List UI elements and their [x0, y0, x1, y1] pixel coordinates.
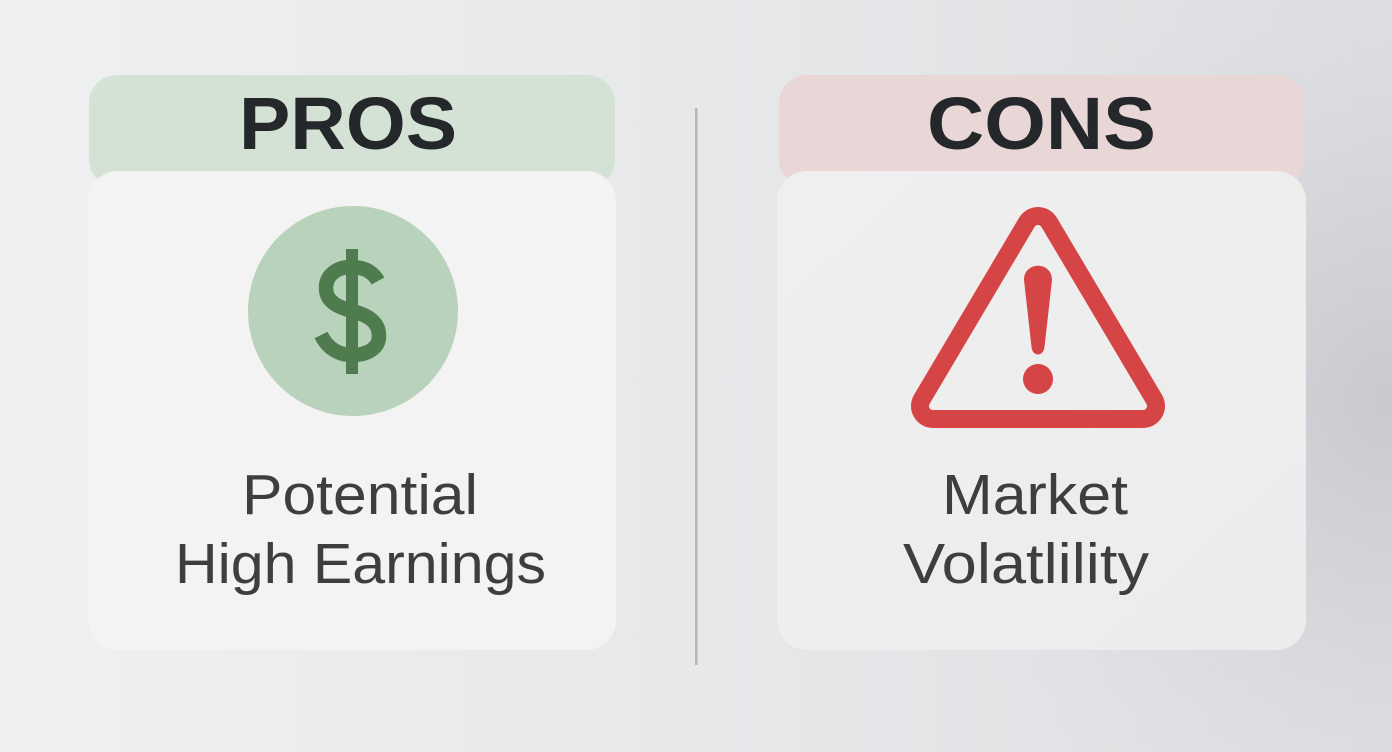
cons card: [777, 171, 1306, 650]
cons header band: [779, 75, 1305, 187]
text: Market Volatlility: Volatlility: [903, 532, 1150, 596]
pros header band: [89, 75, 615, 187]
text: Market Volatlility: [903, 463, 1150, 596]
text: Potential High Earnings: Potential: [242, 463, 478, 527]
divider line: [695, 108, 698, 665]
text: Market Volatlility: Market: [942, 463, 1128, 527]
pros card: [88, 171, 616, 650]
icon: warning triangle: [920, 216, 1156, 419]
panel: cons: [777, 75, 1306, 650]
heading: PROS: PROS: [239, 82, 457, 165]
text: Potential High Earnings: High Earnings: [175, 532, 546, 596]
panel: pros: [88, 75, 616, 650]
icon: dollar coin: [248, 206, 458, 416]
text: Potential High Earnings: [175, 463, 546, 596]
heading: CONS: CONS: [927, 82, 1156, 165]
